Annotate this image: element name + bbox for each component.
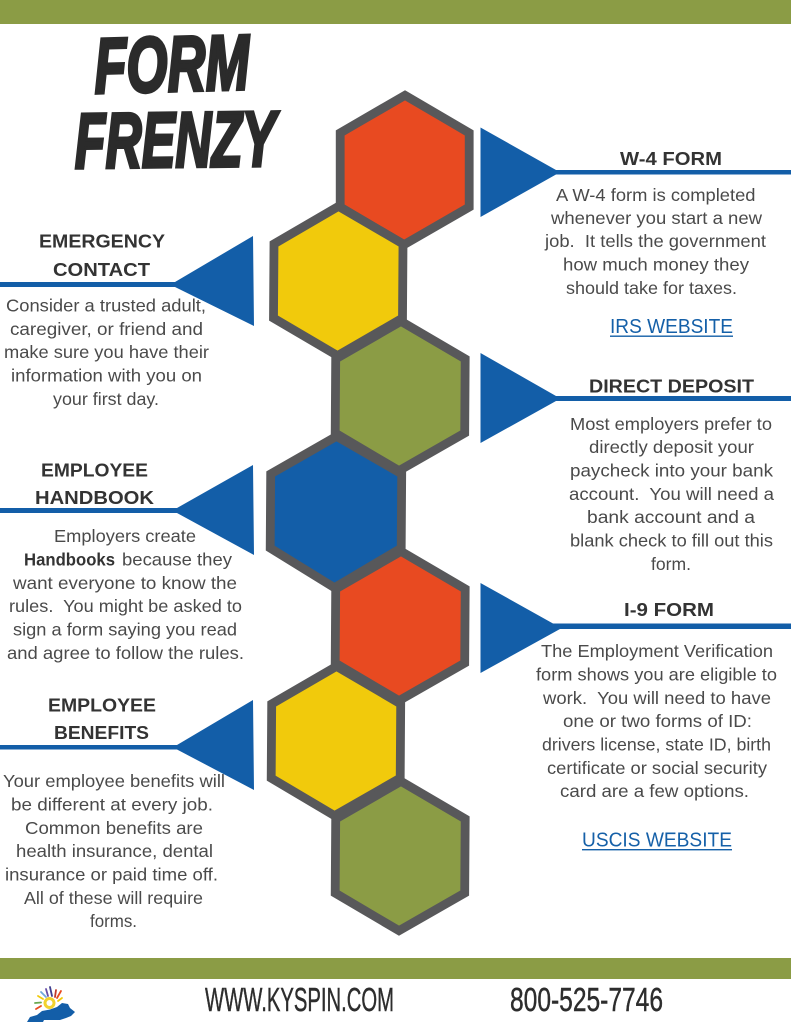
body text: card are a few options.	[560, 781, 749, 801]
body text: make sure you have their	[4, 342, 209, 362]
heading: CONTACT	[53, 259, 151, 280]
heading: DIRECT DEPOSIT	[589, 376, 755, 396]
body text: Most employers prefer to	[570, 414, 772, 434]
body text	[7, 526, 244, 663]
panel: W-4 form	[480, 128, 791, 338]
title: Form Frenzy	[74, 18, 280, 185]
body text: information with you on	[11, 366, 202, 386]
hexagon: orange middle	[335, 551, 465, 701]
body text: drivers license, state ID, birth	[542, 734, 771, 754]
body text	[569, 414, 774, 574]
body text: Employers create	[54, 526, 196, 546]
arrow and rule	[480, 583, 791, 673]
heading: EMPLOYEE	[48, 694, 156, 716]
body text: form shows you are eligible to	[536, 664, 777, 684]
body text: work. You will need to have	[542, 688, 771, 708]
hexagon: yellow	[274, 206, 403, 356]
body text: rules. You might be asked to	[9, 596, 242, 616]
body text: and agree to follow the rules.	[7, 643, 244, 663]
body text	[3, 771, 225, 931]
panel: employee benefits	[0, 694, 254, 931]
arrow and rule	[480, 353, 791, 443]
heading	[48, 694, 156, 743]
bottom green bar	[0, 958, 791, 979]
panel: employee handbook	[0, 460, 254, 663]
body text: directly deposit your	[589, 437, 754, 457]
hexagon: green	[335, 321, 465, 471]
body text: caregiver, or friend and	[10, 319, 203, 339]
body text: because they	[122, 550, 232, 570]
heading: I-9 FORM	[624, 599, 714, 620]
body text	[4, 296, 209, 409]
arrow and rule	[0, 465, 254, 555]
body text	[544, 185, 766, 298]
heading	[35, 460, 155, 508]
body text: whenever you start a new	[550, 208, 762, 228]
heading: EMPLOYEE	[41, 460, 148, 480]
arrow and rule	[480, 128, 791, 217]
heading: HANDBOOK	[35, 487, 155, 508]
body text: job. It tells the government	[544, 231, 766, 251]
logo: Kentucky with sunburst	[27, 987, 75, 1022]
body text: should take for taxes.	[566, 278, 737, 298]
body text: Your employee benefits will	[3, 771, 225, 791]
body text: bank account and a	[587, 507, 755, 527]
body text: health insurance, dental	[16, 841, 213, 861]
body text: be different at every job.	[11, 794, 213, 814]
panel: direct deposit	[480, 353, 791, 574]
hexagon: green bottom	[335, 781, 465, 931]
body text: how much money they	[563, 254, 749, 274]
body text: account. You will need a	[569, 484, 774, 504]
heading	[39, 230, 166, 280]
body text	[536, 641, 777, 801]
top green bar	[0, 0, 791, 24]
footer: phone number: 800-525-7746	[510, 981, 663, 1018]
body text: paycheck into your bank	[570, 460, 773, 480]
hexagon chain	[270, 95, 469, 931]
body text: sign a form saying you read	[13, 620, 237, 640]
arrow and rule	[0, 236, 254, 326]
link: USCIS website: USCIS WEBSITE	[582, 830, 732, 852]
panel: I-9 form	[480, 583, 791, 852]
hexagon: orange top	[340, 95, 469, 245]
body text: The Employment Verification	[541, 641, 773, 661]
body text: form.	[651, 554, 691, 574]
hexagon: blue	[270, 436, 402, 588]
heading: W-4 FORM	[620, 148, 722, 169]
arrow and rule	[0, 700, 254, 790]
body text: one or two forms of ID:	[563, 711, 752, 731]
title: Form Frenzy: FRENZY	[74, 95, 280, 185]
body text: your first day.	[53, 389, 159, 409]
link: IRS website: IRS WEBSITE	[610, 316, 733, 338]
body text: Consider a trusted adult,	[6, 296, 206, 316]
title: Form Frenzy: FORM	[93, 18, 252, 110]
body text: A W-4 form is completed	[556, 185, 756, 205]
body text: All of these will require	[24, 888, 203, 908]
hexagon: yellow lower	[271, 666, 401, 816]
heading: BENEFITS	[54, 722, 149, 743]
body text: Handbooks	[24, 550, 115, 570]
body text: insurance or paid time off.	[5, 864, 218, 884]
body text: want everyone to know the	[12, 573, 237, 593]
body text: Common benefits are	[25, 818, 203, 838]
panel: emergency contact	[0, 230, 254, 409]
footer: website: WWW.KYSPIN.COM	[205, 981, 394, 1018]
body text: certificate or social security	[547, 758, 767, 778]
body text: blank check to fill out this	[570, 530, 773, 550]
body text: forms.	[90, 911, 137, 931]
heading: EMERGENCY	[39, 230, 166, 252]
